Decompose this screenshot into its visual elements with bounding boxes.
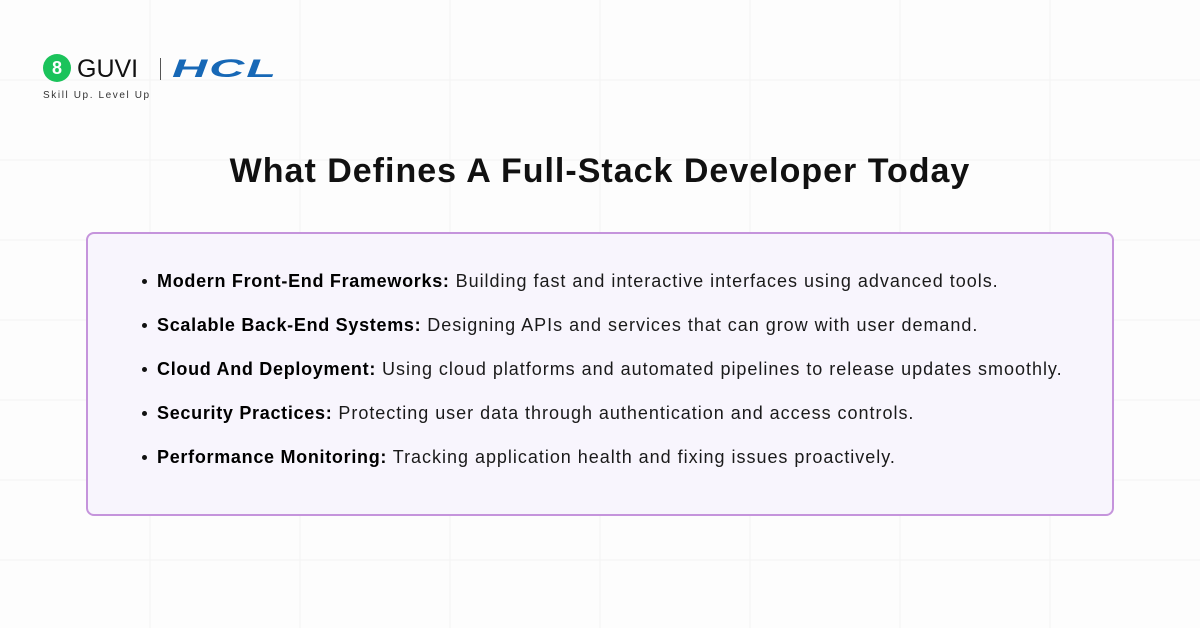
item 5: Performance Monitoring: Tracking application health and fixing issues proactively. [157,447,896,467]
item 4: Security Practices: Protecting user data through authentication and access controls. [157,403,914,423]
item 1: Modern Front-End Frameworks: Building fast and interactive interfaces using advanced tools. [157,271,999,291]
icon: guvi: 8 [52,58,62,78]
guvi text: GUVI [77,55,138,83]
title: What Defines A Full-Stack Developer Today [230,152,970,190]
logo [43,54,278,101]
hcl text: HCL [172,55,278,83]
tagline: Skill Up. Level Up [43,90,151,101]
panel: list [86,232,1114,516]
item 3: Cloud And Deployment: Using cloud platforms and automated pipelines to release updates smoothly. [157,359,1063,379]
item 2: Scalable Back-End Systems: Designing APIs and services that can grow with user demand. [157,315,978,335]
icon: guvi [43,54,71,82]
